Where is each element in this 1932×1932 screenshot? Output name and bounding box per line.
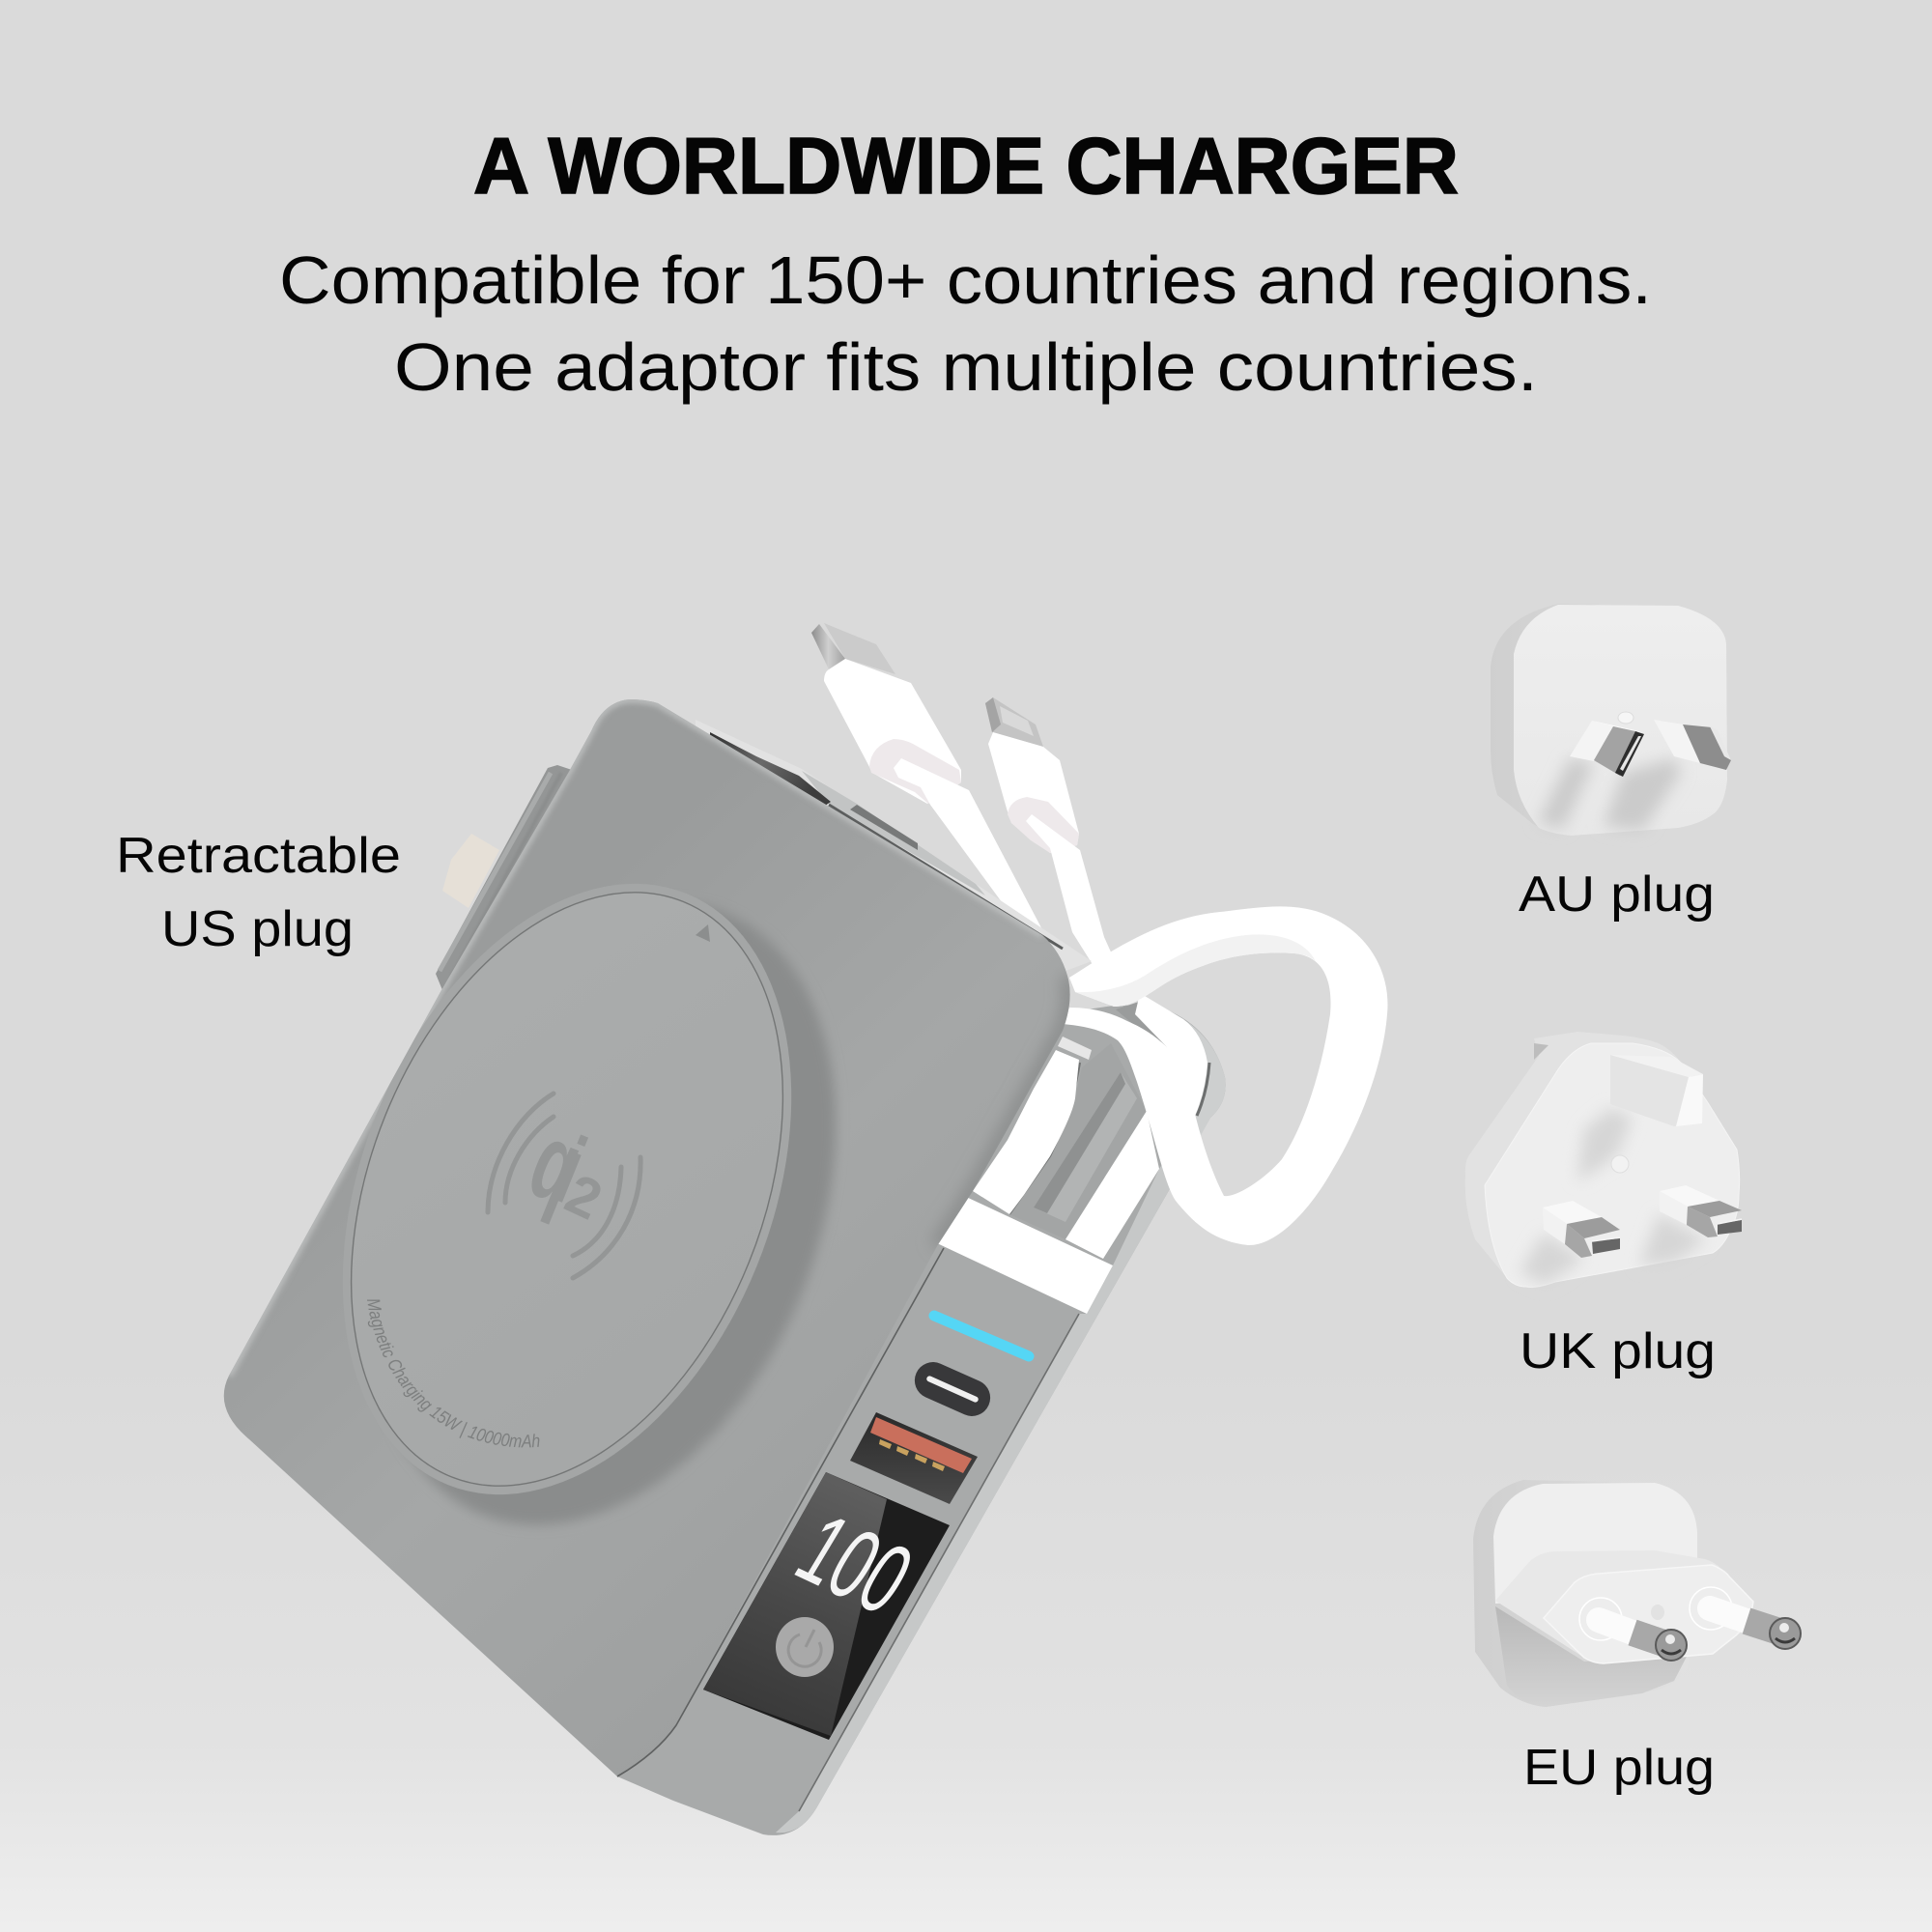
side panel (617, 1005, 1226, 1835)
qi2 logo: q (515, 1099, 598, 1227)
Lightning cable connector (985, 697, 1079, 853)
subtitle (279, 242, 1652, 405)
stored cable band left (973, 1050, 1079, 1214)
qi2 logo: 2 (556, 1162, 611, 1233)
UK top prong (1610, 1055, 1703, 1126)
curved disc caption: Magnetic Charging 15W | 10000mAh (367, 1300, 539, 1447)
AU plug (1491, 604, 1731, 836)
power button (776, 1617, 834, 1677)
US plug prong (442, 834, 499, 908)
subtitle: One adaptor fits multiple countries. (394, 329, 1538, 405)
US plug mount bar (436, 765, 572, 993)
USB-A port (850, 1412, 978, 1504)
title: A WORLDWIDE CHARGER (473, 121, 1459, 211)
UK right prong (1660, 1185, 1742, 1237)
AU plug prong shadows (1538, 758, 1681, 831)
USB-C port (909, 1356, 996, 1422)
disc direction arrow (696, 924, 710, 942)
qi2 logo: i (543, 1117, 599, 1224)
disc outer ring (355, 884, 792, 1494)
AU plug label: AU plug (1519, 867, 1715, 923)
UK plug body (1465, 1032, 1740, 1287)
white cable strap (937, 1196, 1113, 1314)
LCD display panel (703, 1472, 950, 1740)
LED indicator (934, 1316, 1029, 1356)
front body shell (224, 699, 1070, 1776)
AU right prong (1654, 720, 1731, 770)
AU plug body (1491, 604, 1727, 836)
stored cable band right (1065, 1111, 1159, 1259)
disc top surface (350, 892, 784, 1487)
qi2 logo (488, 1094, 640, 1278)
magnetic disc (351, 884, 838, 1527)
AU plug dimple (1618, 712, 1634, 724)
disc raised rim shadow (415, 907, 838, 1527)
power bank product (224, 624, 1387, 1835)
USB-C cable connector (811, 623, 961, 804)
top port strip (696, 720, 1092, 976)
UK left prong (1543, 1201, 1620, 1258)
UK plug label: UK plug (1520, 1323, 1716, 1379)
side cap seam (1197, 1063, 1209, 1116)
USB-C flat cable (894, 758, 1072, 966)
side cap (1116, 1000, 1226, 1150)
EU plug label: EU plug (1523, 1740, 1715, 1796)
EU plug raised socket (1495, 1550, 1753, 1663)
EU plug (1473, 1480, 1801, 1707)
AU left prong (1570, 721, 1644, 777)
back strand of cable (1135, 993, 1208, 1116)
cable loop (1063, 906, 1387, 1245)
stored cable pin (1058, 1037, 1092, 1060)
EU plug dimple (1651, 1605, 1664, 1620)
battery percentage readout: 100 (779, 1494, 930, 1635)
label: retractable US plug: US plug (161, 901, 354, 957)
EU right pin (1690, 1587, 1801, 1649)
EU plug lower shadow (1495, 1606, 1688, 1707)
EU plug back body (1473, 1480, 1697, 1707)
side light edge strip (776, 1111, 1210, 1833)
label: retractable US plug (116, 828, 401, 957)
UK plug (1465, 1032, 1742, 1287)
Lightning flat cable (1026, 814, 1113, 966)
seam line (617, 1248, 944, 1776)
UK plug dimple (1611, 1155, 1629, 1173)
recess centre panel (1009, 1043, 1147, 1239)
UK plug notch (1534, 1043, 1548, 1060)
label: retractable US plug: Retractable (116, 828, 401, 884)
EU left pin (1579, 1598, 1687, 1661)
subtitle: Compatible for 150+ countries and regions. (279, 242, 1652, 318)
UK plug prong shadows (1520, 1108, 1707, 1285)
